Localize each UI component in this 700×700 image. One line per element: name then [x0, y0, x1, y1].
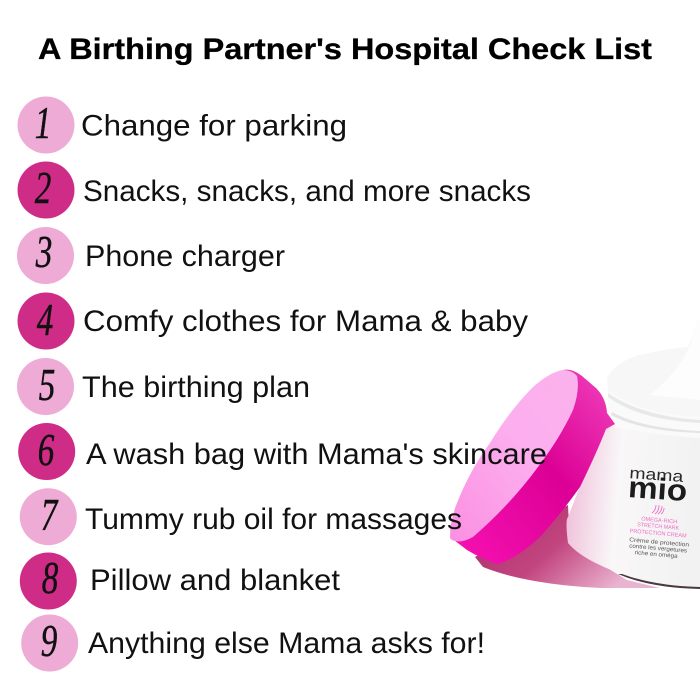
wave mark [652, 505, 664, 514]
item text 3: Phone charger [85, 240, 285, 273]
number badge 6: 6 [38, 424, 54, 475]
number badge 8: 8 [42, 552, 58, 603]
jar label: STRETCH MARK [637, 522, 680, 532]
number badge 7: 7 [41, 489, 59, 540]
number badge 4 [18, 292, 74, 350]
jar label: contre les vergetures [629, 543, 687, 555]
jar shadow [475, 505, 660, 588]
number badge 2: 2 [35, 162, 51, 213]
item 9 [21, 614, 485, 672]
item 7 [20, 488, 462, 545]
number badge 1 [18, 96, 74, 154]
item 6 [18, 423, 547, 480]
item 8 [20, 552, 341, 610]
item text 4: Comfy clothes for Mama & baby [83, 305, 528, 338]
jar neck and rim [604, 388, 700, 438]
item text 9: Anything else Mama asks for! [88, 627, 485, 660]
item text 2: Snacks, snacks, and more snacks [83, 175, 531, 208]
number badge 7 [20, 488, 77, 545]
item 5 [17, 358, 310, 415]
item 3 [17, 226, 285, 284]
item 1 [18, 96, 347, 154]
item text 8: Pillow and blanket [90, 564, 341, 597]
item text 7: Tummy rub oil for massages [85, 503, 462, 536]
number badge 4: 4 [37, 294, 53, 345]
item 4 [18, 292, 528, 350]
number badge 6 [18, 423, 75, 480]
number badge 9: 9 [41, 615, 57, 666]
jar label: PROTECTION CREAM [629, 529, 687, 540]
jar label: Crème de protection [629, 537, 689, 549]
jar label [627, 465, 689, 560]
lid side band [450, 370, 615, 564]
jar label: riche en oméga [634, 550, 679, 560]
product photo: Mama Mio cream jar with pink lid [450, 320, 700, 589]
number badge 9 [21, 614, 78, 672]
item text 1: Change for parking [81, 110, 347, 142]
number badge 8 [20, 552, 77, 610]
number badge 5 [17, 358, 74, 415]
jar label: mio [627, 471, 688, 508]
lid top face [450, 370, 578, 542]
number badge 2 [18, 162, 74, 218]
item 2 [18, 162, 531, 218]
product description: OMEGA-RICH [641, 516, 677, 526]
number badge 5: 5 [39, 359, 55, 410]
brand name: mama [629, 465, 684, 486]
number badge 3: 3 [35, 226, 52, 277]
cream [607, 320, 700, 417]
item text 6: A wash bag with Mama's skincare [86, 438, 547, 471]
number badge 1: 1 [35, 97, 51, 148]
item text 5: The birthing plan [82, 371, 310, 404]
number badge 3 [17, 226, 74, 284]
jar body [566, 425, 700, 587]
title: A Birthing Partner's Hospital Check List [38, 33, 652, 66]
